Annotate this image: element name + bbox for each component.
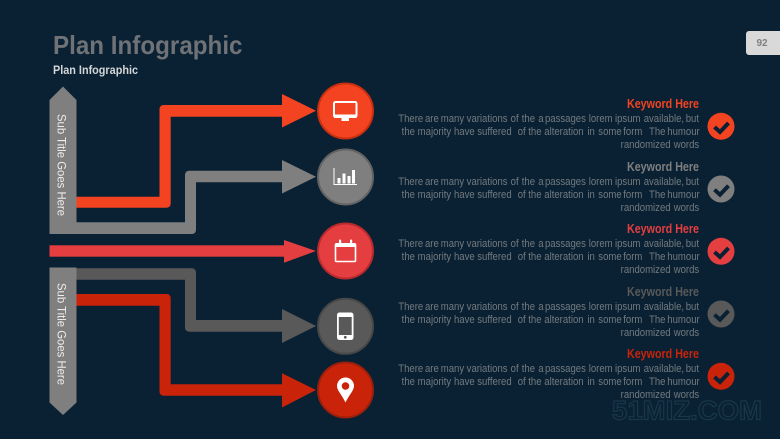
text block 5: the xyxy=(402,376,415,388)
text block 5: of xyxy=(511,363,519,375)
text block 2 xyxy=(398,159,700,214)
text block 3: the xyxy=(522,238,535,250)
text block 5: Keyword Here xyxy=(627,346,699,361)
text block 1: lorem xyxy=(589,113,613,125)
text block 5: humour xyxy=(667,376,700,388)
text block 5: many xyxy=(441,363,465,375)
text block 4: many xyxy=(441,301,465,313)
text block 3 xyxy=(398,221,700,276)
text block 5: passages xyxy=(545,363,586,375)
text block 2: many xyxy=(441,176,465,188)
text block 5: have xyxy=(454,376,475,388)
text block 1: alteration xyxy=(544,126,584,138)
text block 4: lorem xyxy=(589,301,613,313)
check icon 3 xyxy=(708,238,734,265)
text block 3: of xyxy=(511,238,519,250)
text block 5: available, xyxy=(644,363,684,375)
text block 2: but xyxy=(686,176,699,188)
text block 3: passages xyxy=(545,238,586,250)
text block 4: Keyword Here xyxy=(627,284,699,299)
text block 1: available, xyxy=(644,113,684,125)
text block 4: available, xyxy=(644,301,684,313)
text block 3: some xyxy=(598,251,622,263)
text block 1: There xyxy=(398,113,424,125)
text block 1: of xyxy=(511,113,519,125)
watermark: 51MIZ.COM xyxy=(612,396,762,426)
text block 3: There xyxy=(398,238,424,250)
text block 4: the xyxy=(402,314,415,326)
text block 2: some xyxy=(598,189,622,201)
text block 1: many xyxy=(441,113,465,125)
text block 1: of xyxy=(518,126,526,138)
text block 4 xyxy=(398,284,700,339)
subtitle: Plan Infographic xyxy=(53,63,138,77)
arrow: dark red xyxy=(76,294,316,408)
text block 5: randomized xyxy=(621,389,671,401)
text block 2: Keyword Here xyxy=(627,159,699,174)
text block 3: Keyword Here xyxy=(627,221,699,236)
text block 2: words xyxy=(673,202,699,214)
text block 5: in xyxy=(587,376,595,388)
text block 2: the xyxy=(402,189,415,201)
text block 2: form xyxy=(623,189,642,201)
text block 3: variations xyxy=(467,238,508,250)
text block 5: of xyxy=(518,376,526,388)
arrow: red xyxy=(50,240,316,263)
text block 3: The xyxy=(649,251,666,263)
text block 1: variations xyxy=(467,113,508,125)
text block 3: lorem xyxy=(589,238,613,250)
text block 1 xyxy=(398,96,700,151)
text block 4: alteration xyxy=(544,314,584,326)
text block 4: randomized xyxy=(621,327,671,339)
lower vertical label arrow xyxy=(50,268,76,415)
text block 2: majority xyxy=(418,189,452,201)
text block 2: variations xyxy=(467,176,508,188)
text block 3: randomized xyxy=(621,264,671,276)
text block 1: Keyword Here xyxy=(627,96,699,111)
text block 3: many xyxy=(441,238,465,250)
text block 2: ipsum xyxy=(615,176,641,188)
text block 2: a xyxy=(538,176,544,188)
text block 1: The xyxy=(649,126,666,138)
text block 2: the xyxy=(528,189,542,201)
text block 2: in xyxy=(587,189,595,201)
text block 3: a xyxy=(538,238,544,250)
arrow: orange xyxy=(76,94,316,208)
text block 1: the xyxy=(522,113,535,125)
icon: calendar circle xyxy=(318,224,373,278)
text block 4: but xyxy=(686,301,699,313)
arrow: dark grey xyxy=(76,268,316,343)
text block 3: humour xyxy=(667,251,700,263)
text block 3: the xyxy=(402,251,415,263)
text block 2: of xyxy=(518,189,526,201)
text block 4: humour xyxy=(667,314,700,326)
text block 4: The xyxy=(649,314,666,326)
text block 3: are xyxy=(425,238,439,250)
text block 4: There xyxy=(398,301,424,313)
text block 2: The xyxy=(649,189,666,201)
text block 5: suffered xyxy=(477,376,512,388)
text block 4: words xyxy=(673,327,699,339)
text block 2: available, xyxy=(644,176,684,188)
text block 4: of xyxy=(518,314,526,326)
text block 5: alteration xyxy=(544,376,584,388)
text block 5: some xyxy=(598,376,622,388)
text block 1: some xyxy=(598,126,622,138)
text block 5: lorem xyxy=(589,363,613,375)
icon: bar chart circle xyxy=(318,150,373,204)
text block 1: humour xyxy=(667,126,700,138)
text block 1: majority xyxy=(418,126,452,138)
text block 4: form xyxy=(623,314,642,326)
text block 1: passages xyxy=(545,113,586,125)
text block 3: of xyxy=(518,251,526,263)
text block 3: suffered xyxy=(477,251,512,263)
text block 2: humour xyxy=(667,189,700,201)
text block 4: passages xyxy=(545,301,586,313)
text block 4: of xyxy=(511,301,519,313)
text block 2: alteration xyxy=(544,189,584,201)
text block 5: are xyxy=(425,363,439,375)
text block 4: suffered xyxy=(477,314,512,326)
check icon 4 xyxy=(708,300,734,328)
text block 2: the xyxy=(522,176,535,188)
text block 3: majority xyxy=(418,251,452,263)
upper vertical label arrow: Sub Title Goes Here xyxy=(54,114,68,216)
check icon 5 xyxy=(708,363,734,390)
icon: map pin circle xyxy=(318,362,373,418)
check icon 1 xyxy=(708,113,734,140)
title: Plan Infographic xyxy=(53,30,242,60)
text block 1: words xyxy=(673,139,699,151)
lower vertical label arrow: Sub Title Goes Here xyxy=(54,283,68,385)
text block 1: are xyxy=(425,113,439,125)
text block 1: the xyxy=(528,126,542,138)
text block 4: majority xyxy=(418,314,452,326)
text block 1: randomized xyxy=(621,139,671,151)
arrow: grey xyxy=(76,160,316,234)
text block 1: form xyxy=(623,126,642,138)
page number badge xyxy=(746,31,780,55)
text block 5: The xyxy=(649,376,666,388)
text block 1: a xyxy=(538,113,544,125)
text block 2: suffered xyxy=(477,189,512,201)
upper vertical label arrow xyxy=(50,86,76,234)
text block 5 xyxy=(398,346,700,401)
text block 3: words xyxy=(673,264,699,276)
text block 5: variations xyxy=(467,363,508,375)
text block 2: are xyxy=(425,176,439,188)
text block 5: form xyxy=(623,376,642,388)
text block 3: the xyxy=(528,251,542,263)
text block 5: majority xyxy=(418,376,452,388)
text block 4: a xyxy=(538,301,544,313)
text block 4: ipsum xyxy=(615,301,641,313)
icon: smartphone circle xyxy=(318,299,373,354)
text block 4: in xyxy=(587,314,595,326)
text block 3: in xyxy=(587,251,595,263)
text block 5: the xyxy=(528,376,542,388)
text block 4: variations xyxy=(467,301,508,313)
page number badge: 92 xyxy=(756,38,768,49)
text block 5: but xyxy=(686,363,699,375)
text block 5: the xyxy=(522,363,535,375)
text block 5: There xyxy=(398,363,424,375)
text block 5: ipsum xyxy=(615,363,641,375)
text block 2: randomized xyxy=(621,202,671,214)
text block 5: words xyxy=(673,389,699,401)
text block 3: have xyxy=(454,251,475,263)
text block 4: have xyxy=(454,314,475,326)
text block 4: some xyxy=(598,314,622,326)
text block 1: ipsum xyxy=(615,113,641,125)
text block 2: lorem xyxy=(589,176,613,188)
text block 4: the xyxy=(522,301,535,313)
text block 4: are xyxy=(425,301,439,313)
text block 5: a xyxy=(538,363,544,375)
text block 3: form xyxy=(623,251,642,263)
text block 3: ipsum xyxy=(615,238,641,250)
text block 3: alteration xyxy=(544,251,584,263)
text block 3: available, xyxy=(644,238,684,250)
text block 4: the xyxy=(528,314,542,326)
text block 2: of xyxy=(511,176,519,188)
text block 1: have xyxy=(454,126,475,138)
text block 2: passages xyxy=(545,176,586,188)
text block 2: There xyxy=(398,176,424,188)
icon: monitor circle xyxy=(318,84,373,138)
text block 1: suffered xyxy=(477,126,512,138)
text block 2: have xyxy=(454,189,475,201)
text block 1: the xyxy=(402,126,415,138)
check icon 2 xyxy=(708,176,734,202)
text block 1: in xyxy=(587,126,595,138)
text block 1: but xyxy=(686,113,699,125)
text block 3: but xyxy=(686,238,699,250)
